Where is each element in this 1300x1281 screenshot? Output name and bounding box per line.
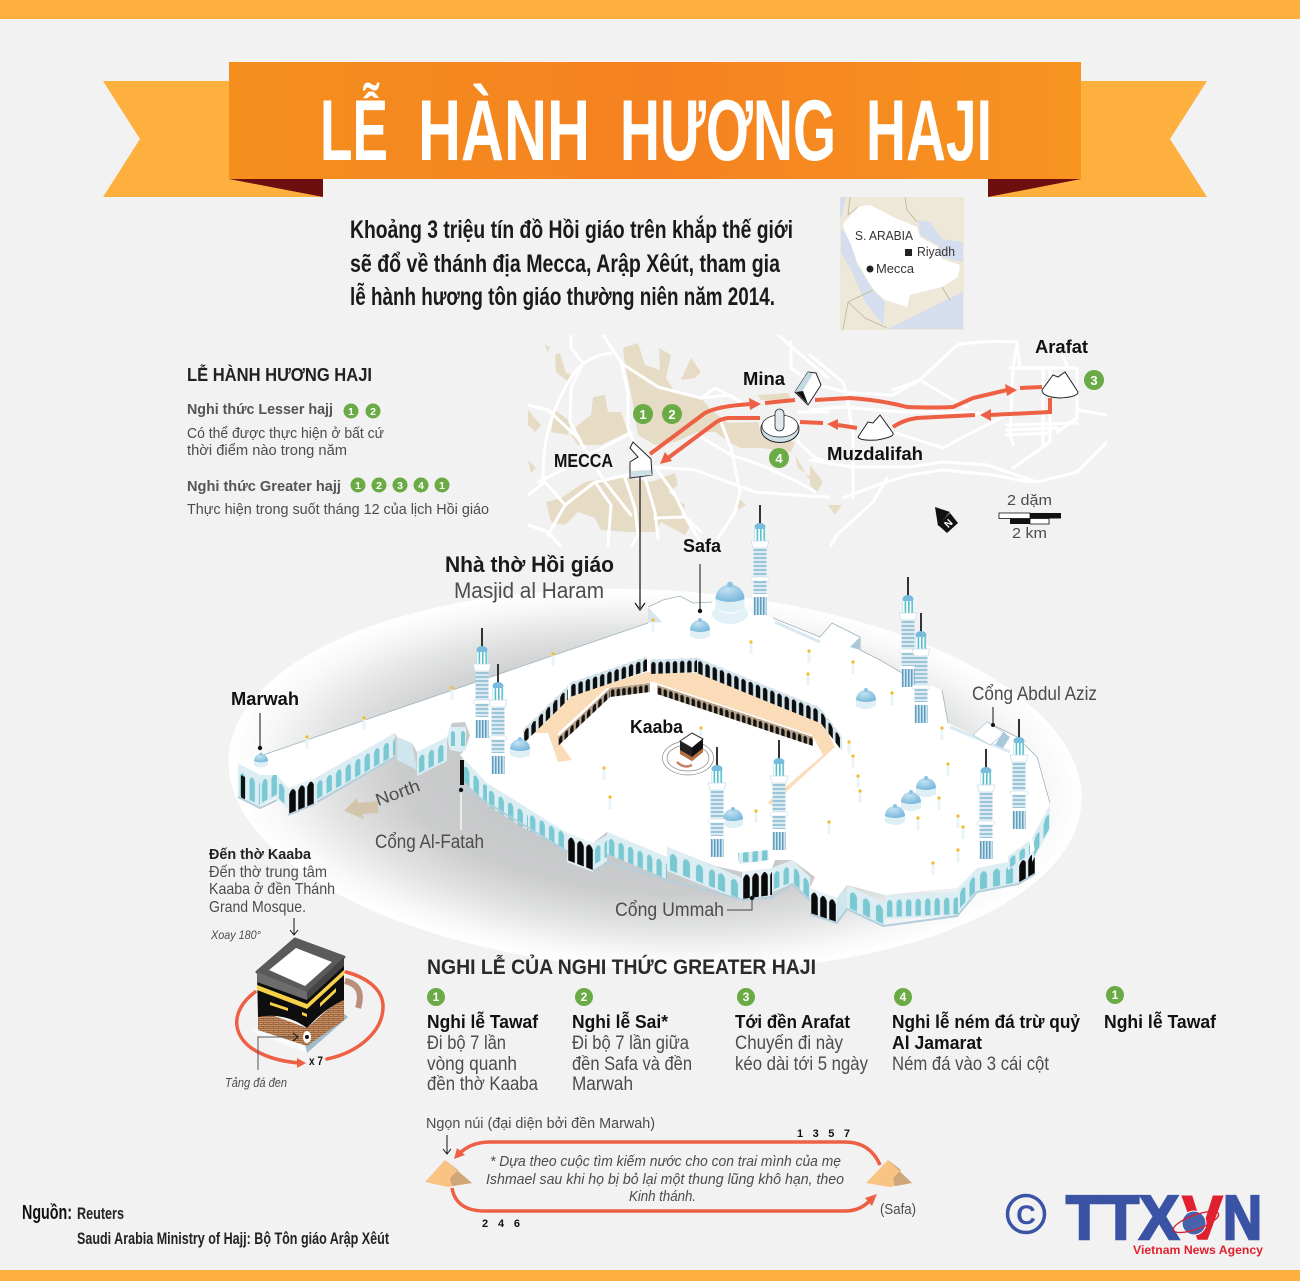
label: Abdul Aziz gate	[972, 684, 1097, 727]
map number badges: 2	[668, 407, 676, 422]
Sai cycle diagram: (Safa)	[880, 1201, 916, 1218]
Kaaba description	[209, 847, 335, 916]
heading: greater hajj rituals: NGHI LỄ CỦA NGHI THỨC GREATER HAJI	[427, 955, 816, 979]
TTXVN logo: N	[1223, 1184, 1262, 1253]
TTXVN logo: TTX	[1066, 1184, 1179, 1253]
label: black stone: Tảng đá đen	[225, 1076, 287, 1090]
Sai cycle diagram: 2 4 6	[482, 1218, 520, 1230]
city route map	[528, 335, 1107, 547]
Kaaba description: Đến thờ trung tâm	[209, 864, 327, 881]
bottom colour bar	[0, 1270, 1300, 1281]
label: Masjid al Haram: Nhà thờ Hồi giáo	[445, 552, 614, 577]
source	[22, 1202, 389, 1248]
legend: hajj types: Có thể được thực hiện ở bất cứ	[187, 425, 384, 442]
legend: hajj types: 2	[370, 406, 376, 418]
title banner	[103, 62, 1207, 197]
step 3: Arafat: 3	[743, 990, 750, 1004]
top colour bar	[0, 0, 1300, 19]
scale bar: 2 km	[1012, 525, 1047, 542]
icon: north arrow	[935, 507, 958, 533]
north arrow: North	[373, 776, 423, 810]
gold belt	[257, 970, 344, 1009]
locator map: Saudi Arabia: Mecca	[876, 261, 915, 276]
map labels: Muzdalifah	[827, 444, 923, 464]
Hijr wall	[345, 981, 360, 1008]
step 2: Sai: Marwah	[572, 1074, 633, 1095]
inner arcade	[558, 683, 813, 746]
intro text	[350, 214, 793, 311]
icon: Muzdalifah mountain	[858, 415, 893, 440]
title: LỄ	[320, 83, 388, 179]
label: Ummah gate: Cổng Ummah	[615, 900, 724, 921]
Kaaba description: Đến thờ Kaaba	[209, 847, 312, 863]
step 2: Sai	[572, 988, 692, 1095]
step 3: Arafat: Tới đền Arafat	[735, 1012, 850, 1032]
step 1: Tawaf: Nghi lễ Tawaf	[427, 1011, 539, 1032]
legend: hajj types: 1	[348, 406, 354, 418]
label: Safa: Safa	[683, 536, 722, 556]
orbit ring	[237, 972, 383, 1063]
mountain: Marwah	[425, 1160, 472, 1187]
intro text: Khoảng 3 triệu tín đồ Hồi giáo trên khắp thế giới	[350, 214, 793, 244]
arrow: Mecca to mosque	[635, 477, 645, 610]
footnote: * Dựa theo cuộc tìm kiếm nước cho con trai mình của mẹ	[490, 1153, 841, 1170]
Sai cycle diagram: 1 3 5 7	[797, 1128, 850, 1140]
lamps	[305, 618, 965, 875]
step 4: Jamarat: Nghi lễ ném đá trừ quỷ	[892, 1011, 1080, 1032]
step 2: Sai: Đi bộ 7 lần giữa	[572, 1033, 689, 1054]
icon: Mecca mosque	[630, 442, 652, 478]
cycle arrows	[452, 1142, 880, 1211]
icon: Mina	[795, 372, 821, 405]
title: HÀNH	[418, 83, 590, 179]
legend: hajj types: Nghi thức Greater hajj	[187, 479, 341, 495]
map number badges: 1	[639, 407, 647, 422]
step 1: Tawaf: vòng quanh	[427, 1054, 517, 1075]
TTXVN logo: V	[1182, 1184, 1223, 1253]
small upper gate with arches	[738, 850, 769, 864]
Kaaba detail illustration	[237, 939, 383, 1070]
arrow to Kaaba	[290, 918, 298, 935]
legend: hajj types: Nghi thức Lesser hajj	[187, 402, 333, 418]
mountain: Safa	[866, 1160, 912, 1187]
domes	[254, 582, 936, 828]
step 5: Tawaf again: 1	[1112, 988, 1119, 1002]
locator map: Saudi Arabia	[840, 197, 964, 330]
step 2: Sai: 2	[581, 990, 588, 1004]
scale bar: 2 dặm	[1007, 492, 1052, 509]
step 1: Tawaf: 1	[433, 990, 440, 1004]
copyright mark: C	[1016, 1200, 1036, 1230]
north arrow	[344, 776, 423, 819]
scale bar	[999, 492, 1061, 542]
step 3: Arafat: Chuyến đi này	[735, 1033, 843, 1054]
map labels: Arafat	[1035, 337, 1088, 357]
title: HAJI	[866, 83, 992, 179]
step 2: Sai: Nghi lễ Sai*	[572, 1011, 668, 1032]
step 4: Jamarat: 4	[900, 990, 907, 1004]
map number badges: 3	[1090, 373, 1098, 388]
roof surface	[238, 596, 1050, 898]
step 1: Tawaf	[427, 988, 539, 1095]
legend: hajj types: Thực hiện trong suốt tháng 12 của lịch Hồi giáo	[187, 501, 489, 518]
icon: Arafat mountain	[1042, 372, 1078, 398]
legend: hajj types: 1	[355, 480, 361, 492]
base	[252, 1028, 307, 1053]
legend: hajj types: 4	[418, 480, 424, 492]
roof	[257, 939, 344, 992]
intro text: lễ hành hương tôn giáo thường niên năm 2014.	[350, 281, 775, 311]
Kaaba description: Kaaba ở đền Thánh	[209, 881, 335, 898]
legend: hajj types	[187, 364, 489, 518]
footnote	[486, 1153, 844, 1205]
label: Al-Fatah gate	[375, 788, 484, 853]
TTXVN logo: Vietnam News Agency	[1133, 1243, 1263, 1257]
footnote: Kinh thánh.	[629, 1188, 696, 1205]
label: Masjid al Haram	[445, 552, 614, 603]
step 4: Jamarat: Ném đá vào 3 cái cột	[892, 1054, 1050, 1075]
Sai cycle diagram: Ngọn núi (đại diện bởi đền Marwah)	[426, 1115, 655, 1132]
step 3: Arafat: kéo dài tới 5 ngày	[735, 1054, 868, 1075]
label: Marwah	[231, 689, 299, 750]
black stone	[303, 1031, 311, 1043]
rotation note: Xoay 180°	[210, 928, 261, 942]
title: HƯƠNG	[620, 83, 836, 179]
map labels: MECCA	[554, 451, 613, 471]
locator map: Saudi Arabia: S. ARABIA	[855, 229, 914, 243]
step 2: Sai: đền Safa và đền	[572, 1054, 692, 1075]
source: Reuters	[77, 1204, 124, 1223]
step 3: Arafat	[735, 988, 868, 1075]
minarets	[473, 505, 1028, 859]
step 5: Tawaf again	[1104, 986, 1217, 1032]
mosque ground shadow	[219, 568, 1091, 992]
small Kaaba with rings	[662, 733, 714, 775]
x7 label: x 7	[309, 1054, 323, 1068]
black cloth	[257, 957, 344, 1028]
mosque illustration	[238, 505, 1050, 927]
legend: hajj types: LỄ HÀNH HƯƠNG HAJI	[187, 364, 372, 385]
map number badges: 4	[775, 451, 783, 466]
source: Saudi Arabia Ministry of Hajj: Bộ Tôn giáo Arập Xêút	[77, 1229, 389, 1248]
wall stone	[258, 995, 344, 1046]
map labels	[554, 337, 1088, 471]
label: Masjid al Haram: Masjid al Haram	[454, 578, 604, 603]
step 1: Tawaf: Đi bộ 7 lần	[427, 1033, 506, 1054]
step 4: Jamarat	[892, 988, 1080, 1075]
step 4: Jamarat: Al Jamarat	[892, 1033, 982, 1053]
icon: north arrow: N	[943, 518, 956, 531]
step 1: Tawaf: đền thờ Kaaba	[427, 1074, 538, 1095]
copyright mark	[1008, 1196, 1044, 1232]
label: Safa	[683, 536, 722, 613]
Kaaba description: Grand Mosque.	[209, 899, 306, 916]
title	[320, 83, 992, 179]
icon: pillar	[761, 409, 799, 442]
label: Abdul Aziz gate: Cổng Abdul Aziz	[972, 684, 1097, 705]
legend: hajj types: thời điểm nào trong năm	[187, 442, 347, 459]
map number badges	[633, 370, 1104, 468]
legend: hajj types: 3	[397, 480, 403, 492]
TTXVN logo	[1066, 1184, 1263, 1257]
source: Nguồn:	[22, 1202, 72, 1224]
arrow to mountain	[443, 1135, 451, 1154]
label: Al-Fatah gate: Cổng Al-Fatah	[375, 832, 484, 853]
legend: hajj types: 2	[376, 480, 382, 492]
map labels: Mina	[743, 369, 786, 389]
locator map: Saudi Arabia: Riyadh	[917, 244, 955, 259]
label: Marwah: Marwah	[231, 689, 299, 709]
outer walls	[238, 733, 1050, 927]
route arrows	[650, 387, 1050, 458]
legend: hajj types: 1	[439, 480, 445, 492]
step 5: Tawaf again: Nghi lễ Tawaf	[1104, 1011, 1217, 1032]
east side annex	[1005, 830, 1032, 870]
label: Kaaba: Kaaba	[630, 717, 684, 737]
wing junction block	[447, 727, 466, 752]
footnote: Ishmael sau khi họ bị bỏ lại một thung lũng khô hạn, theo	[486, 1171, 844, 1188]
inner courtyard floor	[533, 672, 835, 805]
Sai cycle diagram	[425, 1115, 916, 1230]
black stone pointer	[258, 1033, 298, 1070]
upper arcade	[523, 657, 842, 751]
intro text: sẽ đổ về thánh địa Mecca, Arập Xêút, tham gia	[350, 250, 781, 278]
